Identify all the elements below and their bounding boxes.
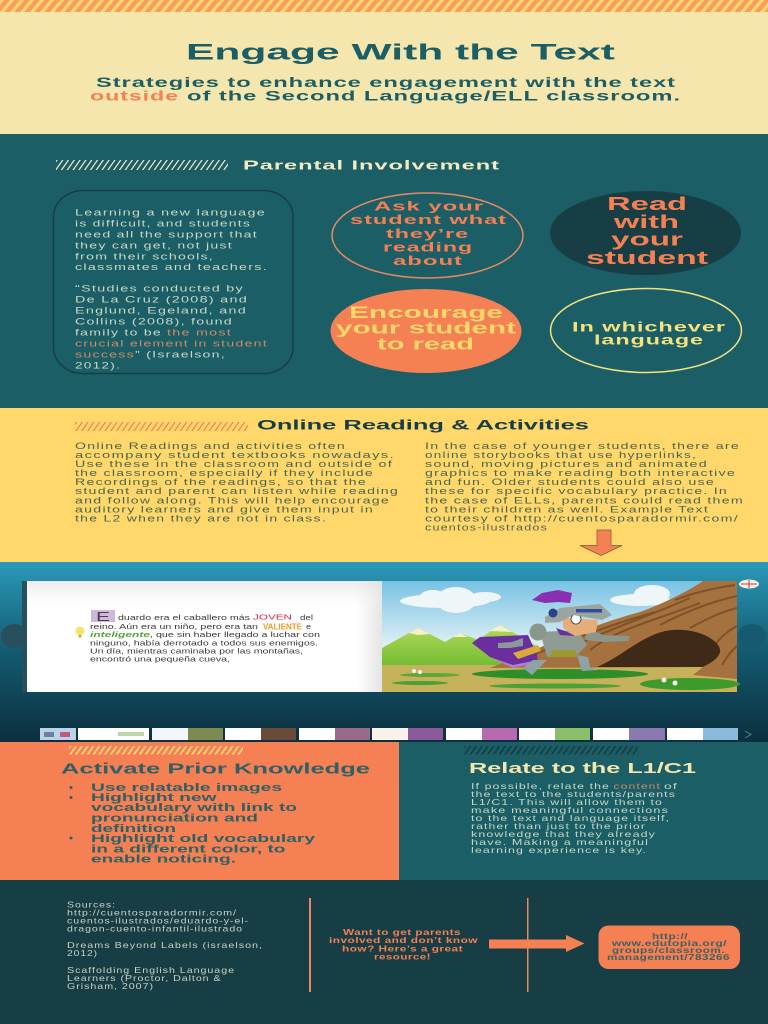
relate paragraph: to the text and language itself, <box>471 813 670 823</box>
decorative striped top band <box>0 0 768 12</box>
bubble: encourage your student <box>330 289 522 373</box>
hill <box>490 581 737 679</box>
rounded text box: need all the support that <box>75 230 258 240</box>
bubble: read with your student: student <box>586 248 708 268</box>
heading: activate prior knowledge: Activate Prior Knowledge <box>61 760 370 778</box>
rounded text box: Collins (2008), found <box>75 316 233 326</box>
bubble: in whichever language <box>550 288 742 372</box>
mountains <box>382 625 540 668</box>
text column left: accompany student textbooks nowadays. <box>75 450 395 460</box>
section heading: parental involvement <box>56 158 500 172</box>
text column left: Recordings of the readings, so that the <box>75 477 367 487</box>
story text: e <box>306 622 311 631</box>
sword <box>513 645 541 659</box>
rounded text box: is difficult, and students <box>75 218 251 228</box>
relate paragraph: make meaningful connections <box>471 805 669 815</box>
relate paragraph: learning experience is key. <box>471 845 647 855</box>
resource link box: groups/classroom. <box>612 946 725 955</box>
bubble: ask your student <box>332 193 523 278</box>
story text: duardo era el caballero más <box>118 613 250 622</box>
relate paragraph <box>471 781 678 855</box>
bullet list: pronunciation and <box>91 812 258 824</box>
next button <box>738 624 766 648</box>
collar <box>556 628 575 636</box>
text column right: In the case of younger students, there are <box>425 441 740 451</box>
section heading: online reading <box>75 418 589 432</box>
panel: footer <box>0 880 768 1024</box>
text column left: and follow along. This will help encourage <box>75 496 390 506</box>
text column right: sound, moving pictures and animated <box>425 459 708 469</box>
rounded text box: classmates and teachers. <box>75 262 268 272</box>
rounded text box: ” (Israelson, <box>135 350 226 360</box>
bubble: encourage your student: your student <box>336 320 517 338</box>
bubble: read with your student <box>550 191 741 275</box>
subtitle: of the Second Language/ELL classroom. <box>187 88 681 104</box>
bubble: ask your student: reading <box>383 240 473 254</box>
story text: inteligente <box>90 630 150 639</box>
sources text: Learners (Proctor, Dalton & <box>67 974 222 983</box>
bubble: ask your student: student what <box>350 212 507 227</box>
illustration: knight and cave <box>382 581 740 692</box>
heading: relate to L1/C1: Relate to the L1/C1 <box>469 760 696 777</box>
resource prompt <box>329 928 479 962</box>
arm <box>585 628 630 642</box>
bullet list: Use relatable images <box>91 782 282 794</box>
rounded text box: Englund, Egeland, and <box>75 306 247 316</box>
skirt <box>550 650 577 657</box>
bubble: ask your student: about <box>393 253 463 268</box>
story text: Un día, mientras caminaba por las montañas, <box>90 646 303 656</box>
helmet <box>545 604 612 623</box>
thumbnail next arrow <box>745 731 751 738</box>
relate paragraph: rather than just to the prior <box>471 821 646 831</box>
flowers <box>412 669 678 686</box>
cave opening <box>597 630 720 667</box>
bullet list <box>70 782 317 866</box>
text column left: the L2 when they are not in class. <box>75 514 327 524</box>
title: Engage With the Text <box>186 40 616 64</box>
rounded text box: the most <box>167 328 232 338</box>
panel: parental involvement <box>0 134 768 408</box>
clouds <box>400 585 670 613</box>
bubble: read with your student: Read <box>607 194 687 214</box>
bubble: ask your student: they’re <box>386 226 469 241</box>
panel: storybook screenshot <box>0 562 768 742</box>
sources text: 2012) <box>67 949 98 958</box>
text column left: auditory learners and give them input in <box>75 504 374 514</box>
sources text: Dreams Beyond Labels (israelson, <box>67 941 263 950</box>
decorative hatch <box>69 746 243 754</box>
rounded text box: success <box>75 350 135 360</box>
bullet list: enable noticing. <box>91 854 236 866</box>
text column right: graphics to make reading both interactive <box>425 468 736 478</box>
text column right: the case of ELLs, parents could read them <box>425 496 744 506</box>
legs <box>523 660 547 675</box>
text column left: student and parent can listen while reading <box>75 486 399 496</box>
armour <box>540 630 587 657</box>
decorative hatch <box>464 746 638 754</box>
text column left <box>75 441 399 524</box>
arrow: down to storybook <box>580 530 622 556</box>
story text: , que sin haber llegado a luchar con <box>150 630 320 639</box>
sources text: Scaffolding English Language <box>67 966 235 975</box>
bubble: read with your student: your <box>611 230 683 250</box>
book page shadow <box>22 581 28 692</box>
panel: relate to L1/C1 <box>399 742 768 880</box>
panel: online reading and activities <box>0 408 768 562</box>
ground <box>382 665 737 692</box>
resource link box: management/783266 <box>607 953 731 962</box>
rounded text box <box>54 190 293 374</box>
drop cap: E <box>96 609 111 624</box>
relate paragraph: of <box>664 781 678 791</box>
grass patches <box>472 669 740 690</box>
rounded text box: family to be <box>75 328 162 338</box>
resource link box <box>598 926 740 969</box>
thumbnail strip <box>40 728 738 740</box>
bubble: encourage your student: to read <box>377 336 474 354</box>
sources text: dragon-cuento-infantil-ilustrado <box>67 924 243 934</box>
relate paragraph: knowledge that they already <box>471 829 656 839</box>
story text: reino. Aún era un niño, pero era tan <box>90 622 258 631</box>
sources text: Grisham, 2007) <box>67 982 154 991</box>
subtitle: Strategies to enhance engagement with the text <box>96 75 676 90</box>
bullet list: Highlight old vocabulary <box>91 833 317 845</box>
rounded text box: 2012). <box>75 360 121 370</box>
bubble: read with your student: with <box>612 212 679 232</box>
knight <box>472 590 630 675</box>
gauntlet on cape <box>498 638 523 648</box>
story text: JOVEN <box>253 612 292 622</box>
sources text: http://cuentosparadormir.com/ <box>67 908 237 918</box>
rounded text box: Learning a new language <box>75 208 266 218</box>
icon: light bulb <box>76 626 84 638</box>
text column right: these for specific vocabulary practice. In <box>425 486 728 496</box>
rounded text box: they can get, not just <box>75 240 233 250</box>
relate paragraph: content <box>614 781 661 791</box>
text column left: the classroom, especially if they include <box>75 468 374 478</box>
rounded text box: crucial element in student <box>75 338 268 348</box>
bullet list: in a different color, to <box>91 844 286 856</box>
text column left: Online Readings and activities often <box>75 441 346 451</box>
text column right: online storybooks that use hyperlinks, <box>425 450 697 460</box>
arrow: to resource link <box>489 935 584 952</box>
panel: header <box>0 0 768 134</box>
story text: del <box>300 613 313 622</box>
resource prompt: Want to get parents <box>343 928 461 937</box>
text column right <box>425 441 744 532</box>
face <box>563 618 598 636</box>
book text page <box>27 581 382 692</box>
text column right: cuentos-ilustrados <box>425 522 548 532</box>
rounded text box: De La Cruz (2008) and <box>75 294 248 304</box>
text column left: Use these in the classroom and outside of <box>75 459 393 469</box>
subtitle <box>90 75 681 104</box>
text column right: to their children as well. Example Text <box>425 504 709 514</box>
resource prompt: involved and don’t know <box>329 936 479 945</box>
sources text <box>67 900 263 991</box>
resource prompt: how? Here’s a great <box>342 944 463 954</box>
resource link box: http:// <box>652 932 689 941</box>
previous button <box>1 624 27 648</box>
zoom button <box>739 580 759 588</box>
story text: VALIENTE <box>263 622 302 632</box>
bubble: in whichever language: language <box>594 332 704 348</box>
divider left <box>309 898 311 992</box>
panel: activate prior knowledge <box>0 742 399 880</box>
sources text: cuentos-ilustrados/eduardo-y-el- <box>67 916 249 926</box>
bullet list: vocabulary with link to <box>91 802 297 814</box>
drop cap <box>91 609 115 624</box>
text column right: and fun. Older students could also use <box>425 477 715 487</box>
story text: encontró una pequeña cueva, <box>90 654 230 664</box>
plume <box>532 590 572 603</box>
text column right: courtesy of http://cuentosparadormir.com/ <box>425 514 739 524</box>
cape <box>472 635 538 667</box>
relate paragraph: If possible, relate the <box>471 781 610 791</box>
bubble: ask your student: Ask your <box>374 198 484 214</box>
rounded text box: from their schools, <box>75 252 214 262</box>
subtitle: outside <box>90 88 179 104</box>
relate paragraph: have. Making a meaningful <box>471 837 649 847</box>
relate paragraph: L1/C1. This will allow them to <box>471 797 663 807</box>
relate paragraph: the text to the students/parents <box>471 789 676 799</box>
story text: ninguno, había derrotado a todos sus enemigos. <box>90 638 318 648</box>
story text <box>90 612 320 664</box>
section heading: parental involvement: Parental Involvement <box>243 158 500 172</box>
section heading: online reading: Online Reading & Activities <box>257 418 589 432</box>
bullet list: Highlight new <box>91 792 217 804</box>
sources text: Sources: <box>67 900 116 910</box>
bubble: encourage your student: Encourage <box>349 304 503 322</box>
bubble: in whichever language: In whichever <box>572 320 726 334</box>
resource link box: www.edutopia.org/ <box>610 939 728 948</box>
divider right <box>527 898 528 992</box>
rounded text box: “Studies conducted by <box>75 284 244 294</box>
bullet list: definition <box>91 823 176 835</box>
resource prompt: resource! <box>374 952 431 962</box>
